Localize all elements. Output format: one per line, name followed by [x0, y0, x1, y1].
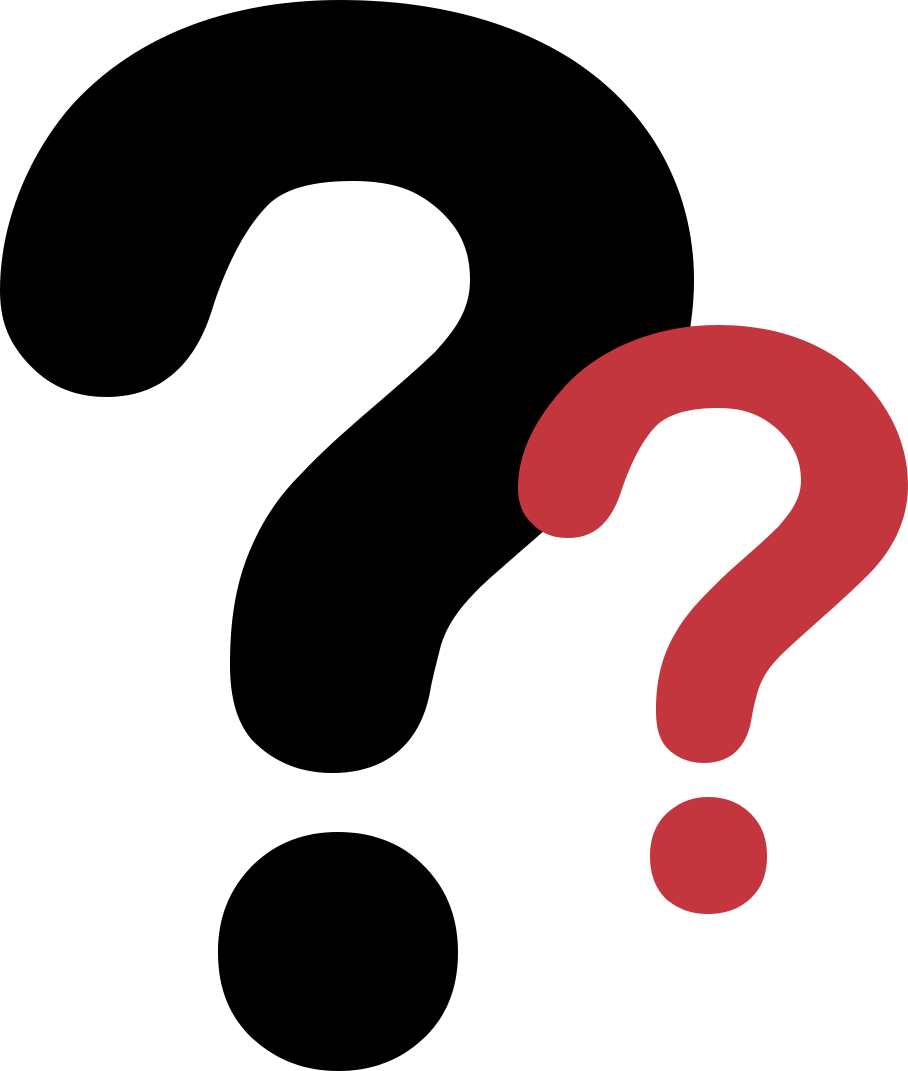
red question mark dot: [650, 797, 767, 914]
black question mark dot: [218, 832, 458, 1071]
red question mark hook: [518, 325, 908, 763]
icon: small red question mark: [518, 325, 908, 914]
icon: large black question mark: [0, 0, 694, 1071]
black question mark hook: [0, 0, 694, 773]
